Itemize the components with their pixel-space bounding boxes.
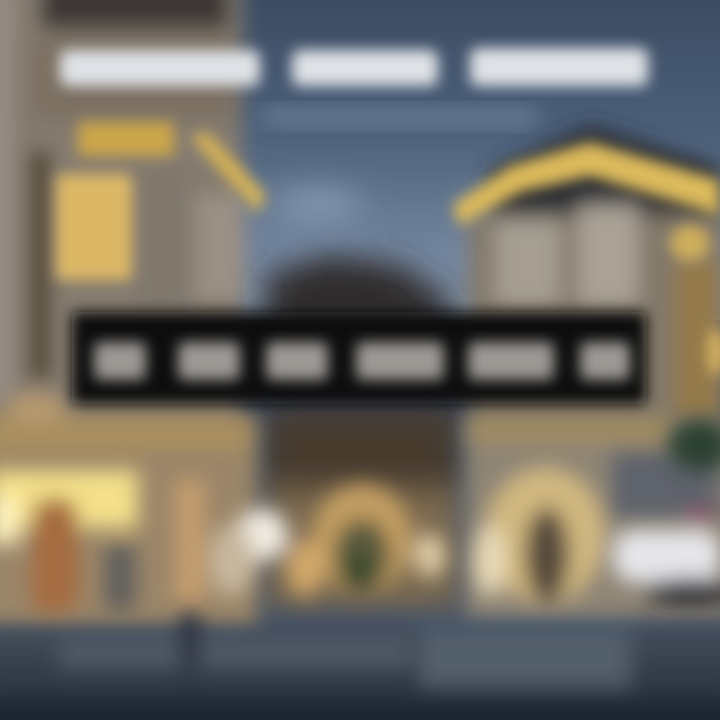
- panel: left building: [0, 0, 245, 440]
- street: [0, 612, 720, 720]
- subtitle: faint blurred text: [262, 108, 537, 126]
- title: blurred white headline: [60, 48, 648, 86]
- banner: black panel: [72, 312, 646, 404]
- panel: center building: [262, 191, 462, 610]
- panel: right building: [468, 125, 720, 440]
- banner text: blurred light blocks: [94, 342, 630, 380]
- sky background: [0, 0, 720, 320]
- storefront windows and arches: [0, 419, 720, 613]
- panel: lower storefronts: [0, 392, 720, 630]
- left building lit windows: [56, 122, 267, 280]
- right building gold roof trim: [452, 142, 720, 376]
